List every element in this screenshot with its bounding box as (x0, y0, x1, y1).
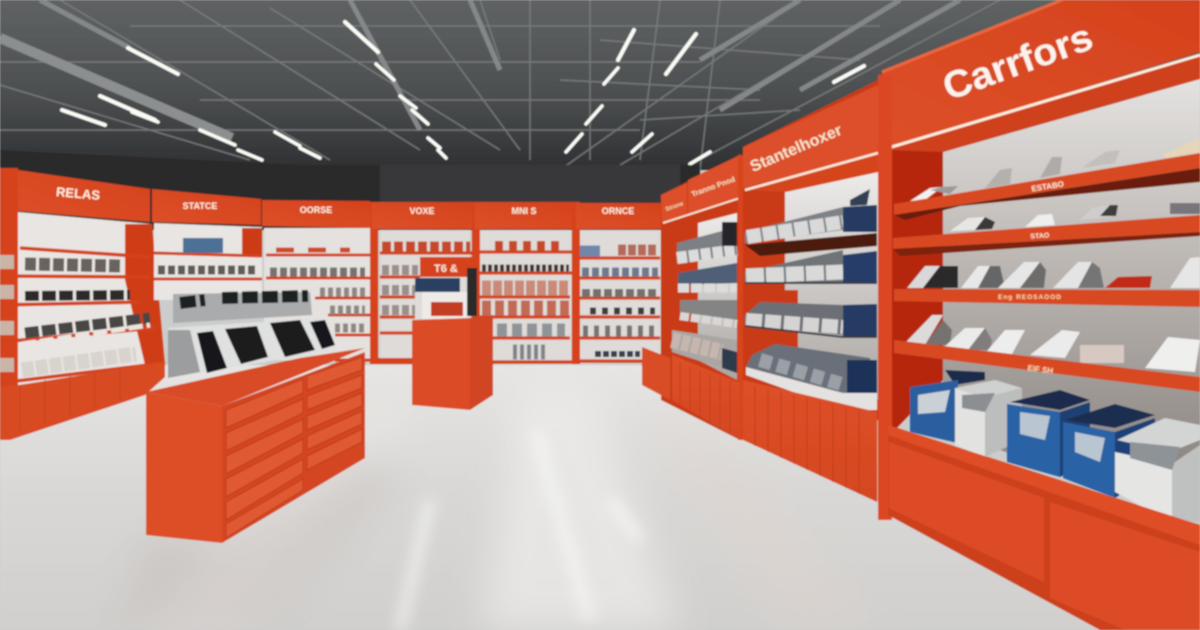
shelf 2: STAO (1030, 232, 1050, 241)
red sign on pillar (420, 257, 478, 277)
middle bay shelving (743, 80, 878, 502)
large sign: Carrfors (882, 0, 1200, 150)
floor (0, 365, 1100, 630)
shelf items row 1 (910, 138, 1200, 201)
shelf 2 (893, 215, 1200, 256)
right bay shelving (878, 0, 1200, 630)
sign: Stantelhoxer (743, 85, 878, 188)
cabinet door right (1050, 502, 1200, 630)
red sign on pillar: T6 & (434, 263, 458, 275)
blue printer 4 (1063, 404, 1155, 498)
third bay shelving (642, 155, 744, 440)
sign left (661, 183, 687, 223)
sign text: VOXE: VOXE (409, 206, 435, 216)
ceiling (0, 0, 1200, 178)
shelf 3 (894, 289, 1200, 307)
center bay 5 (472, 202, 575, 364)
center bay 4 (370, 202, 474, 364)
sign text: RELAS: RELAS (55, 184, 101, 203)
shelf 1: ESTABO (1031, 180, 1064, 194)
shelf 3: Eng REOSAOOD (998, 294, 1062, 301)
sign right: Tranno Pnod (690, 174, 737, 199)
sales counter (146, 292, 365, 543)
sign text: MNS: MNI S (511, 206, 537, 216)
sign: Stantelhoxer: Stantelhoxer (748, 122, 845, 176)
third bay products (672, 222, 737, 373)
center pillar display (412, 257, 493, 410)
dark back wall band (0, 150, 700, 230)
left wall bay 1 (0, 168, 165, 440)
grey printer 5 (1115, 418, 1200, 522)
grey printer 2 (955, 380, 1022, 457)
sign text: OORSE: OORSE (300, 205, 332, 215)
left wall bay 3 (262, 200, 375, 360)
shelf 4 (894, 340, 1200, 392)
sign text: ORNCE: ORNCE (602, 206, 634, 216)
shelf 1 (894, 153, 1200, 220)
cabinet door left (889, 442, 1044, 582)
sign text: STATCE: STATCE (183, 201, 217, 211)
product row 3 (745, 302, 877, 337)
center bay 6 (572, 202, 661, 364)
product row 1 (745, 189, 877, 256)
large sign: Carrfors: Carrfors (937, 16, 1098, 109)
base cabinet (888, 425, 1200, 630)
blue printer 1 (910, 370, 985, 443)
counter drawers (226, 357, 362, 538)
ceiling lights (62, 22, 864, 178)
left wall bay 2 (152, 189, 262, 300)
shelf items row 4 (906, 315, 1200, 372)
sign right (688, 155, 740, 215)
shelf items row 2 (950, 203, 1200, 231)
device display (168, 292, 336, 378)
sign left: Strane (665, 201, 685, 213)
blue printer 3 (1007, 390, 1090, 477)
shelf items row 3 (907, 257, 1200, 288)
product row 2 (745, 250, 877, 283)
product row 4 (746, 344, 877, 410)
shelf 4: EIF SH (1027, 363, 1054, 376)
